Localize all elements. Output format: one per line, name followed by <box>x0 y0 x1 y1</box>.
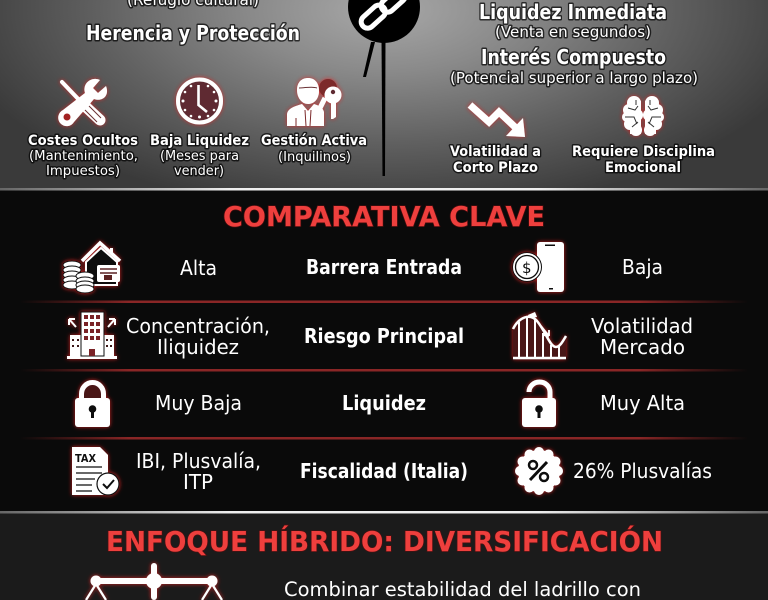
text: hidden costs: Costes Ocultos <box>28 133 138 149</box>
text: market volatility: Mercado <box>600 335 685 359</box>
icon: market roller coaster <box>513 312 566 358</box>
text: short term volatility: Volatilidad a <box>450 144 541 160</box>
icon: tax document: TAX <box>75 453 96 465</box>
icon: closed padlock <box>75 383 110 427</box>
text: market volatility: Volatilidad <box>591 314 693 338</box>
icon: clock <box>178 80 221 122</box>
text: entry barrier label: Barrera Entrada <box>306 255 462 279</box>
icon: office buildings with arrows <box>67 312 117 359</box>
text: high entry barrier value: Alta <box>180 256 217 280</box>
text: hidden costs: (Mantenimiento, <box>29 148 138 164</box>
panel: key comparison background <box>0 190 768 512</box>
icon: open padlock <box>522 382 556 427</box>
text: compound interest: (Potencial superior a largo plazo) <box>450 69 698 87</box>
icon: phone and dollar coin: $ <box>522 259 532 277</box>
panel: hybrid approach background <box>0 513 768 600</box>
text: inheritance and protection: Herencia y Protección <box>86 21 300 45</box>
text: requires emotional discipline: Emocional <box>605 160 681 176</box>
text: very high liquidity: Muy Alta <box>600 391 685 415</box>
text: active management <box>261 133 367 165</box>
heading: hybrid approach: ENFOQUE HÍBRIDO: DIVERSIFICACIÓN <box>106 524 663 558</box>
text: hidden costs: Impuestos) <box>46 163 120 179</box>
text: taxation label: Fiscalidad (Italia) <box>300 459 468 483</box>
text: requires emotional discipline <box>572 144 715 176</box>
text: low liquidity: (Meses para <box>160 148 239 164</box>
text: italian property taxes <box>136 449 261 494</box>
text: very low liquidity: Muy Baja <box>155 391 242 415</box>
text: italian property taxes: ITP <box>183 470 213 494</box>
text: compound interest: Interés Compuesto <box>481 45 666 69</box>
text: active management: (Inquilinos) <box>278 149 351 165</box>
text: active management: Gestión Activa <box>261 133 367 149</box>
icon: percent badge <box>515 447 563 495</box>
text: immediate liquidity: Liquidez Inmediata <box>479 0 667 24</box>
text: low liquidity: vender) <box>174 163 224 179</box>
text: requires emotional discipline: Requiere Disciplina <box>572 144 715 160</box>
text: short term volatility <box>450 144 541 176</box>
text: immediate liquidity <box>479 0 667 41</box>
text: hidden costs <box>28 133 138 179</box>
text: market volatility <box>591 314 693 359</box>
icon: phone and dollar coin <box>512 242 564 292</box>
text: liquidity label: Liquidez <box>342 391 426 415</box>
text: low liquidity <box>150 133 249 179</box>
icon: tax document <box>72 447 119 495</box>
icon: house and coins <box>63 243 120 293</box>
heading: key comparison: COMPARATIVA CLAVE <box>223 201 545 233</box>
text: compound interest <box>450 45 698 87</box>
panel: top comparison background <box>0 0 768 189</box>
text: low liquidity: Baja Liquidez <box>150 133 249 149</box>
icon: brain <box>622 96 664 136</box>
icon: falling zigzag arrow <box>470 105 525 137</box>
text: short term volatility: Corto Plazo <box>453 160 538 176</box>
icon: wrench and screwdriver <box>58 79 107 126</box>
text: capital gains tax: 26% Plusvalías <box>573 459 712 483</box>
text: main risk label: Riesgo Principal <box>304 324 464 348</box>
icon: manager with key <box>287 78 342 126</box>
text: concentration and illiquidity: Iliquidez <box>157 335 239 359</box>
text: italian property taxes: IBI, Plusvalía, <box>136 449 261 473</box>
text: concentration and illiquidity: Concentración, <box>126 314 270 338</box>
text: concentration and illiquidity <box>126 314 270 359</box>
icon: balance scale <box>86 563 222 600</box>
icon: chain link medallion with pins <box>348 0 420 176</box>
text: low entry barrier value: Baja <box>622 255 663 279</box>
text: immediate liquidity: (Venta en segundos) <box>495 23 651 41</box>
